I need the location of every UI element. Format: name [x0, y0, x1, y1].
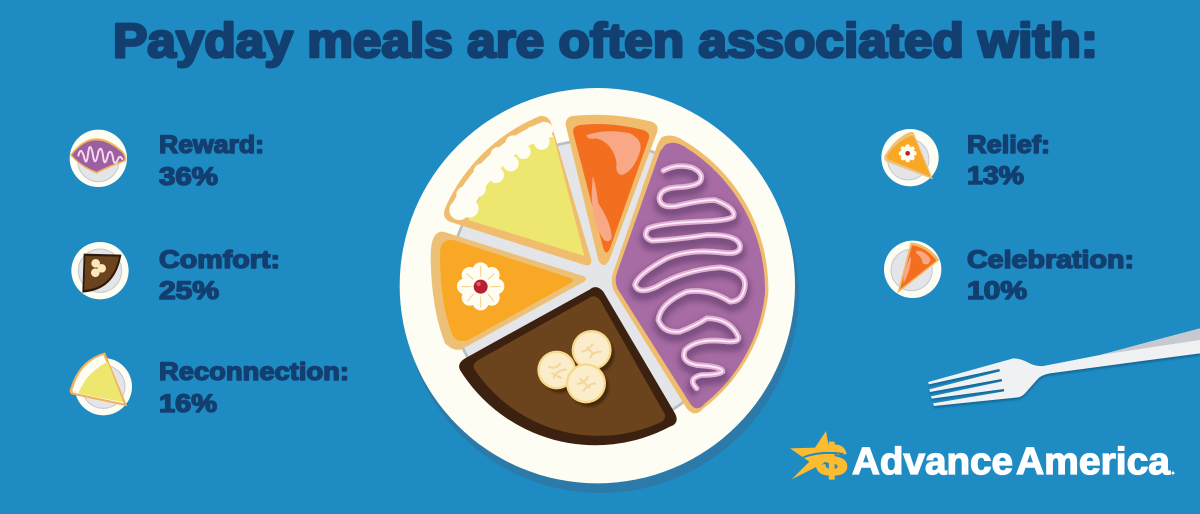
- legend item: celebration: [884, 241, 1134, 305]
- label: Reward: Reward:: [159, 131, 264, 159]
- icon: star and dollar sign: $: [817, 437, 847, 485]
- icon: banana slices: [537, 330, 614, 407]
- label: Comfort: Comfort:: [159, 246, 280, 274]
- inner plate well: [449, 140, 741, 432]
- icon: reconnection pie: [70, 352, 132, 415]
- logo: Advance America: [790, 431, 1174, 485]
- slice: relief 13% amber: [431, 232, 586, 350]
- slice: comfort 25% brown: [459, 287, 677, 445]
- value: 13%: 13%: [967, 162, 1024, 190]
- slice: reconnection 16% yellow: [444, 116, 591, 265]
- icon: relief pie: [881, 129, 939, 186]
- legend item: relief: [881, 129, 1050, 190]
- label: Reconnection: Reconnection:: [159, 358, 349, 386]
- value: 25%: 25%: [159, 277, 219, 305]
- pie chart plate: [400, 88, 799, 493]
- legend item: reconnection: [70, 352, 349, 418]
- label: Celebration: Celebration:: [967, 246, 1134, 274]
- icon: cream flower: [457, 262, 504, 310]
- slice: celebration 10% orange: [566, 115, 658, 265]
- legend item: comfort: [71, 242, 280, 305]
- wordmark: America: America: [1016, 441, 1171, 483]
- registered dot: [1172, 472, 1174, 474]
- wordmark: Advance: Advance: [852, 441, 1013, 483]
- slice: reward 36% purple: [612, 136, 768, 413]
- legend item: reward: [70, 130, 264, 191]
- icon: star and dollar sign: [790, 431, 847, 485]
- value: 36%: 36%: [159, 163, 218, 191]
- value: 16%: 16%: [159, 390, 217, 418]
- icon: reward pie: [70, 130, 127, 187]
- title: Payday meals are often associated with:: [113, 15, 1098, 68]
- plate: [400, 88, 795, 483]
- label: Relief: Relief:: [967, 131, 1050, 159]
- icon: celebration pie: [884, 241, 941, 298]
- plate shadow: [403, 97, 799, 493]
- icon: comfort pie: [71, 242, 129, 299]
- value: 10%: 10%: [967, 277, 1027, 305]
- icon: fork: [928, 328, 1200, 408]
